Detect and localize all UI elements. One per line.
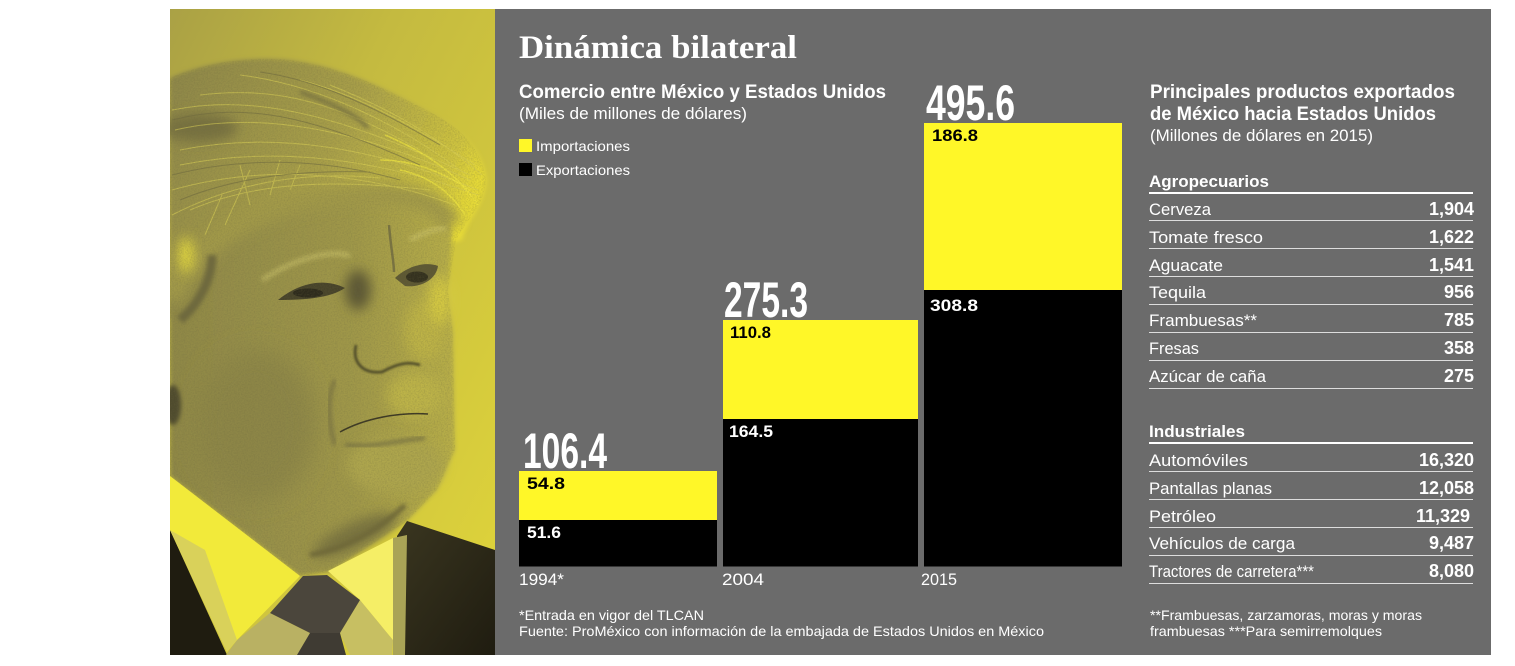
table: agropecuarios: Agropecuarios xyxy=(1149,172,1269,191)
bar group: 2004: 110.8 xyxy=(730,323,771,342)
table: industriales: Industriales xyxy=(1149,422,1245,441)
table: agropecuarios: 1,622 xyxy=(1429,227,1474,247)
table: industriales: 9,487 xyxy=(1429,533,1474,553)
chart footnote and source: Fuente: ProMéxico con información de la embajada de Estados Unidos en México xyxy=(519,623,1044,639)
bar group: 2015: 186.8 xyxy=(932,126,978,145)
bar group: 1994: 106.4 xyxy=(523,423,607,479)
products footnote: **Frambuesas, zarzamoras, moras y moras xyxy=(1150,607,1422,623)
chart heading: Comercio entre México y Estados Unidos xyxy=(519,82,886,103)
bar group: 2015: 2015 xyxy=(921,570,957,589)
legend xyxy=(519,138,630,178)
stacked bar chart xyxy=(519,75,1122,589)
table: agropecuarios xyxy=(1149,172,1474,389)
bar group: 2015: 495.6 xyxy=(926,75,1015,131)
table: agropecuarios: 275 xyxy=(1444,366,1474,386)
bar group: 2015 xyxy=(921,75,1122,589)
table: agropecuarios: Tomate fresco xyxy=(1149,228,1263,247)
eyebrows and eyes xyxy=(262,225,446,300)
chart heading: (Miles de millones de dólares) xyxy=(519,104,747,123)
hair xyxy=(170,58,486,283)
tie xyxy=(270,575,360,633)
table: agropecuarios: Aguacate xyxy=(1149,256,1223,275)
table: industriales xyxy=(1149,422,1474,584)
facial shading xyxy=(162,114,451,565)
table: industriales: Pantallas planas xyxy=(1149,479,1272,498)
legend: Exportaciones xyxy=(536,162,630,178)
products footnote: frambuesas ***Para semirremolques xyxy=(1150,623,1382,639)
table: agropecuarios: Cerveza xyxy=(1149,200,1212,219)
table: agropecuarios: 1,904 xyxy=(1429,199,1474,219)
bar group: 1994: 1994* xyxy=(519,570,564,589)
skin grain xyxy=(170,50,495,580)
table: industriales: 8,080 xyxy=(1429,561,1474,581)
title: Dinámica bilateral xyxy=(519,30,797,66)
table: industriales: Petróleo xyxy=(1149,507,1216,526)
bar group: 2004: 275.3 xyxy=(724,272,808,328)
table: industriales: Tractores de carretera*** xyxy=(1149,562,1314,581)
table: industriales: Automóviles xyxy=(1149,451,1248,470)
table: agropecuarios: 956 xyxy=(1444,282,1474,302)
table: industriales: Vehículos de carga xyxy=(1149,534,1296,553)
bar group: 1994: 54.8 xyxy=(527,474,565,493)
suit xyxy=(397,521,495,655)
shirt and collar xyxy=(226,613,310,655)
bar group: 1994 xyxy=(519,423,717,589)
table: agropecuarios: Azúcar de caña xyxy=(1149,367,1267,386)
table: industriales: 16,320 xyxy=(1419,450,1474,470)
bar group: 2004: 2004 xyxy=(722,570,764,589)
table: industriales: 12,058 xyxy=(1419,478,1474,498)
table: agropecuarios: 1,541 xyxy=(1429,255,1474,275)
hair strokes xyxy=(172,75,482,235)
chart heading xyxy=(519,82,886,123)
bar group: 2004 xyxy=(722,272,918,589)
portrait photo with yellow duotone xyxy=(162,9,495,655)
products heading: Principales productos exportados xyxy=(1150,82,1455,103)
table: agropecuarios: Tequila xyxy=(1149,283,1207,302)
products heading: (Millones de dólares en 2015) xyxy=(1150,126,1373,145)
face xyxy=(170,193,455,576)
products heading: de México hacia Estados Unidos xyxy=(1150,104,1436,125)
bar group: 2015: 308.8 xyxy=(930,296,978,315)
panel: gray background xyxy=(495,9,1491,655)
products heading xyxy=(1150,82,1455,145)
table: agropecuarios: Fresas xyxy=(1149,339,1199,358)
hairline blend xyxy=(172,193,452,300)
chart footnote and source: *Entrada en vigor del TLCAN xyxy=(519,607,704,623)
legend: Importaciones xyxy=(536,138,630,154)
bar group: 1994: 51.6 xyxy=(527,523,561,542)
table: agropecuarios: Frambuesas** xyxy=(1149,311,1257,330)
bar group: 2004: 164.5 xyxy=(729,422,773,441)
nose and mouth xyxy=(329,345,428,446)
table: agropecuarios: 785 xyxy=(1444,310,1474,330)
products footnote xyxy=(1150,607,1422,639)
chart footnote and source xyxy=(519,607,1044,639)
table: industriales: 11,329 xyxy=(1416,506,1470,526)
table: agropecuarios: 358 xyxy=(1444,338,1474,358)
